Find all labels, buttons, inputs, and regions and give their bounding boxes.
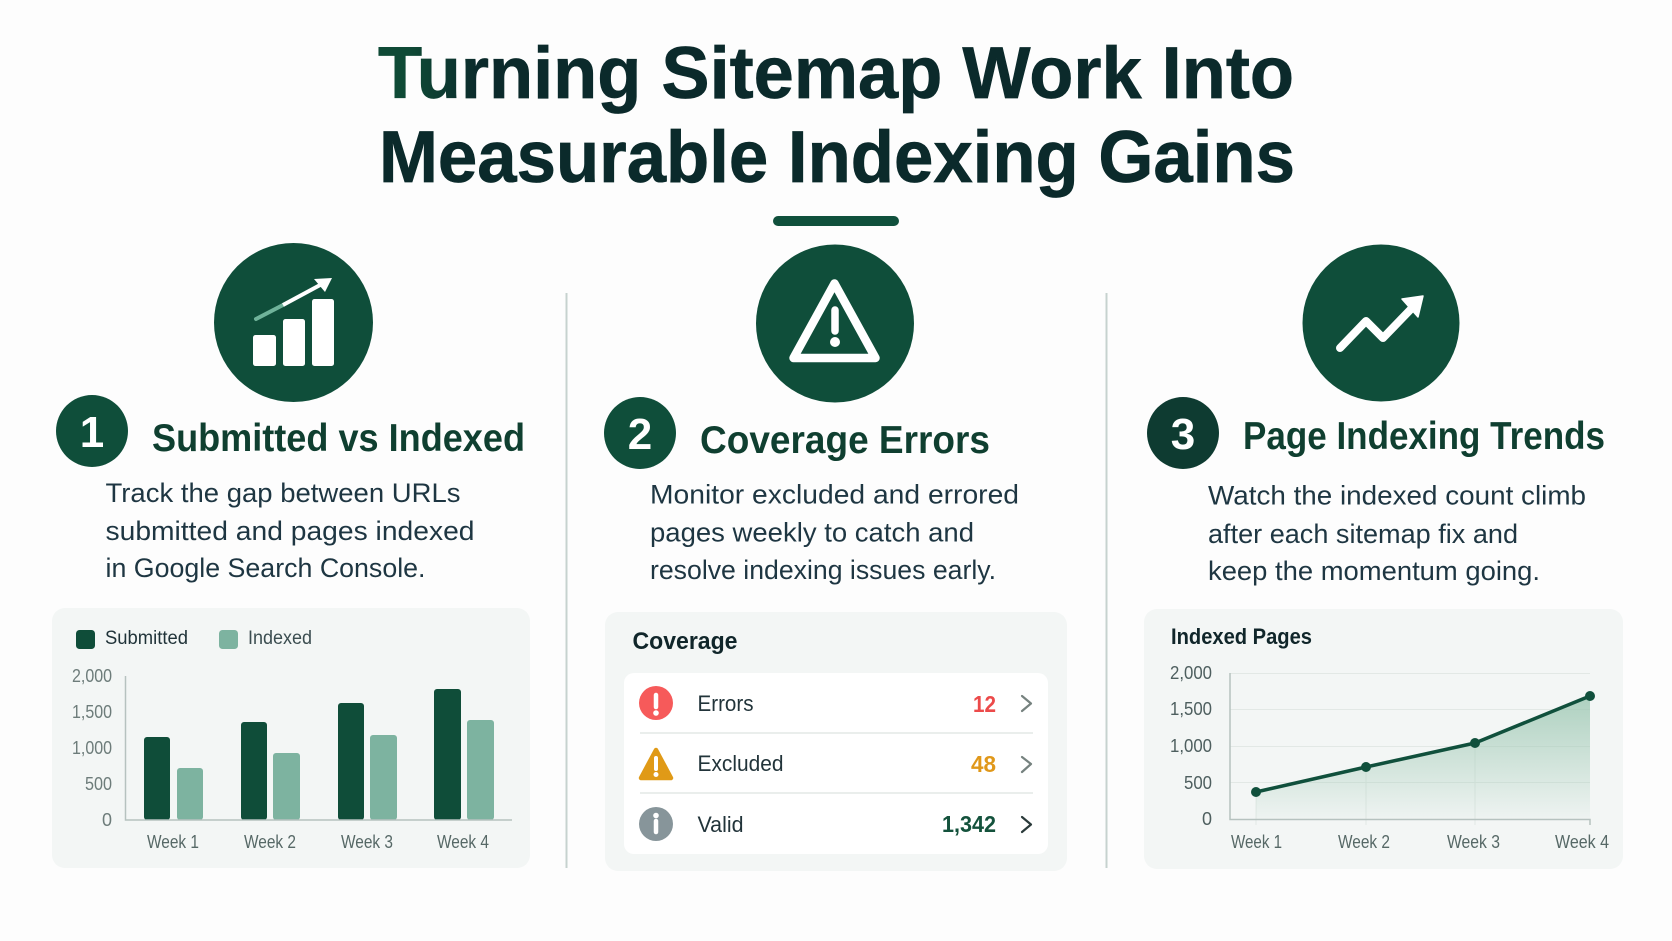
trend line: [1251, 691, 1595, 797]
y axis labels: [1170, 663, 1212, 829]
area fill: [1256, 696, 1590, 820]
y axis labels: 2,000: [1170, 663, 1212, 683]
row: valid: [639, 807, 1031, 841]
week labels: Week 2: [244, 832, 296, 852]
week labels: Week 4: [437, 832, 489, 852]
legend: Indexed: [248, 628, 312, 649]
coverage rows: [624, 673, 1048, 854]
title underline: [773, 216, 899, 226]
description 3: [1208, 480, 1586, 586]
week labels: Week 3: [341, 832, 393, 852]
icon: warning triangle: [756, 244, 914, 402]
y axis labels: 1,500: [72, 702, 112, 722]
y axis labels: 0: [102, 810, 112, 830]
row: errors: Errors: [698, 691, 754, 716]
description 3: Watch the indexed count climb: [1208, 480, 1586, 510]
number badge 3: [1147, 397, 1219, 469]
row: valid: Valid: [698, 812, 744, 837]
y axis labels: 1,500: [1170, 699, 1212, 719]
section 1: submitted vs indexed: [52, 243, 530, 868]
coverage heading: Coverage: [632, 628, 738, 655]
number badge 1: 1: [80, 408, 104, 457]
row: errors: [639, 686, 1031, 720]
row: excluded: [641, 750, 1031, 778]
week labels: Week 2: [1338, 832, 1390, 852]
row: valid: 1,342: [942, 811, 996, 837]
legend: Submitted: [105, 628, 188, 649]
y axis labels: 2,000: [72, 666, 112, 686]
description 2: [650, 480, 1019, 585]
row: excluded: 48: [971, 751, 996, 777]
description 1: [106, 478, 474, 583]
icon: trend arrow: [1302, 244, 1460, 402]
description 3: keep the momentum going.: [1208, 556, 1540, 586]
week labels: [1231, 832, 1609, 852]
panel: bar chart: [52, 608, 530, 868]
chart heading: Indexed Pages: [1171, 624, 1312, 649]
row: errors: 12: [973, 691, 996, 717]
number badge 1: [56, 395, 128, 467]
description 3: after each sitemap fix and: [1208, 519, 1518, 549]
description 1: Track the gap between URLs: [106, 478, 460, 508]
y axis labels: 500: [1184, 773, 1212, 793]
week labels: [147, 832, 489, 852]
week labels: Week 3: [1447, 832, 1500, 852]
legend: [76, 628, 312, 649]
number badge 3: 3: [1171, 410, 1195, 459]
description 1: in Google Search Console.: [106, 553, 426, 583]
title: [378, 33, 1295, 198]
section 2: coverage errors: [604, 244, 1067, 871]
title: Turning Sitemap Work Into: [378, 33, 1294, 114]
week labels: Week 4: [1555, 832, 1609, 852]
panel: line chart: [1144, 609, 1623, 869]
week labels: Week 1: [1231, 832, 1282, 852]
bars: [144, 689, 494, 820]
section 3: page indexing trends: [1144, 244, 1623, 869]
y axis labels: 1,000: [1170, 736, 1212, 756]
y axis labels: 500: [85, 774, 112, 794]
description 1: submitted and pages indexed: [106, 516, 474, 546]
title: Measurable Indexing Gains: [379, 117, 1295, 198]
panel: coverage table: [605, 612, 1067, 871]
y axis labels: 0: [1202, 809, 1212, 829]
heading: page indexing trends: Page Indexing Trends: [1243, 415, 1605, 458]
heading: submitted vs indexed: Submitted vs Indexed: [152, 417, 525, 460]
row: excluded: Excluded: [698, 751, 784, 776]
y axis labels: 1,000: [72, 738, 112, 758]
week labels: Week 1: [147, 832, 199, 852]
y axis labels: [72, 666, 112, 830]
icon: rising bars with arrow: [214, 243, 373, 402]
number badge 2: 2: [628, 410, 652, 459]
description 2: pages weekly to catch and: [650, 518, 974, 548]
description 2: resolve indexing issues early.: [650, 555, 996, 585]
number badge 2: [604, 397, 676, 469]
description 2: Monitor excluded and errored: [650, 480, 1019, 510]
heading: coverage errors: Coverage Errors: [700, 419, 990, 462]
